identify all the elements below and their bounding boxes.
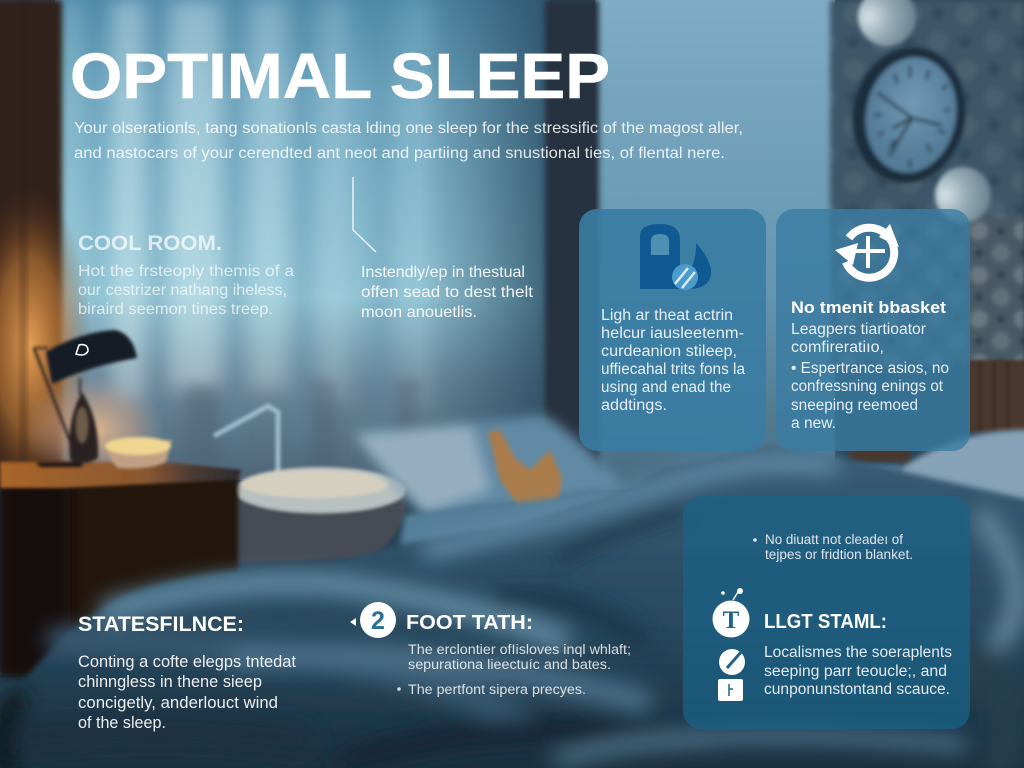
card text: helcur iausleetenm- xyxy=(601,325,744,342)
card text: • Espertrance asios, no xyxy=(791,360,949,377)
panel: cool room xyxy=(78,232,294,318)
foot bath text: sepurationa lieectuíc and bates. xyxy=(408,657,611,672)
card text: Localismes the soeraplents xyxy=(764,644,952,661)
icon: lamp mark xyxy=(76,345,88,355)
card text: Leagpers tiartioator xyxy=(791,321,926,338)
card text: seeping parr teoucle;, and xyxy=(764,663,947,680)
icon: circular plus xyxy=(835,224,899,278)
tub xyxy=(234,467,406,562)
pillow xyxy=(352,415,625,518)
panel: light card xyxy=(579,209,766,451)
panel: cool room: our cestrizer nathang iheless, xyxy=(78,282,287,299)
card text: sneeping reemoed xyxy=(791,397,918,414)
foot bath text: The erclontier ofIisloves inql whlaft; xyxy=(408,642,631,657)
panel: statesfilnce: of the sleep. xyxy=(78,714,166,732)
panel: statesfilnce: STATESFILNCE: xyxy=(78,613,244,636)
lower fold shadows xyxy=(186,380,419,470)
card text: uffiecahal trits fons la xyxy=(601,361,745,378)
card text: Ligh ar theat actrin xyxy=(601,307,733,324)
card text: addtings. xyxy=(601,397,667,414)
panel: cool room: Hot the frsteoply themis of a xyxy=(78,263,294,280)
clock xyxy=(842,38,976,192)
faucet xyxy=(214,406,278,490)
panel: cool room: biraird seemon tines treep. xyxy=(78,301,273,318)
teddy xyxy=(488,430,562,508)
lamp xyxy=(34,330,172,468)
panel: centre note xyxy=(361,264,534,321)
panel: centre note: offen sead to dest thelt xyxy=(361,284,534,301)
headboard xyxy=(850,360,1024,462)
arrow: connector line xyxy=(353,177,376,252)
panel: centre note: moon anouetlis. xyxy=(361,304,477,321)
sheer curtains xyxy=(55,0,550,480)
intro text: and nastocars of your cerendted ant neot and partiing and snustional ties, of flental nere. xyxy=(74,145,725,162)
card text: confressning enings ot xyxy=(791,378,944,395)
icon: small square xyxy=(718,679,743,701)
card heading: No tmenit bbasket xyxy=(791,298,946,317)
foot bath text xyxy=(397,642,631,697)
bedding folds xyxy=(0,462,1017,768)
card text: comfireratiıo, xyxy=(791,339,884,356)
card text: cunponunstontand scauce. xyxy=(764,681,950,698)
icon: small round xyxy=(719,649,745,675)
panel: statesfilnce xyxy=(78,613,296,732)
icon: number 2 badge: 2 xyxy=(371,607,385,635)
icon: T badge xyxy=(712,588,750,638)
left curtain with lamp glow xyxy=(0,0,165,505)
title: OPTIMAL SLEEP xyxy=(70,40,610,112)
panel: foot bath xyxy=(350,602,631,697)
card text: curdeanion stileep, xyxy=(601,343,737,360)
panel: statesfilnce: concigetly, anderlouct wind xyxy=(78,694,278,712)
panel: cool room: COOL ROOM. xyxy=(78,232,222,255)
icon: number 2 badge xyxy=(350,602,396,638)
nightstand xyxy=(0,462,242,675)
card text xyxy=(791,321,949,432)
bed xyxy=(0,445,1024,768)
panel: centre note: Instendly/ep in thestual xyxy=(361,264,525,281)
mattress under pillow xyxy=(400,490,625,545)
card text: a new. xyxy=(791,415,836,432)
foot bath text: The pertfont sipera precyes. xyxy=(408,682,586,697)
intro text: Your olserationls, tang sonationls casta lding one sleep for the stressific of the magost aller, xyxy=(74,120,743,137)
wallpaper xyxy=(830,0,1024,365)
card heading: LLGT STAML: xyxy=(764,611,887,633)
card text: using and enad the xyxy=(601,379,731,396)
panel: statesfilnce: Conting a cofte elegps tntedat xyxy=(78,653,296,671)
card note xyxy=(753,532,913,562)
card text xyxy=(601,307,745,414)
dark curtain xyxy=(545,0,599,490)
icon: T badge: T xyxy=(723,607,740,634)
card note: tejpes or fridtion blanket. xyxy=(765,547,913,562)
card note: No diuatt not cleadeı of xyxy=(765,532,903,547)
intro text xyxy=(74,120,743,162)
icon: lock and drop xyxy=(640,224,711,290)
panel: light stand card xyxy=(683,496,970,729)
panel: statesfilnce: chinngless in thene sieep xyxy=(78,673,262,691)
wall xyxy=(595,0,835,490)
foot bath heading: FOOT TATH: xyxy=(406,612,533,634)
card text xyxy=(764,644,952,698)
right pillow xyxy=(898,430,1024,505)
panel: no treatment card xyxy=(776,209,970,451)
decorative balls xyxy=(858,0,916,46)
